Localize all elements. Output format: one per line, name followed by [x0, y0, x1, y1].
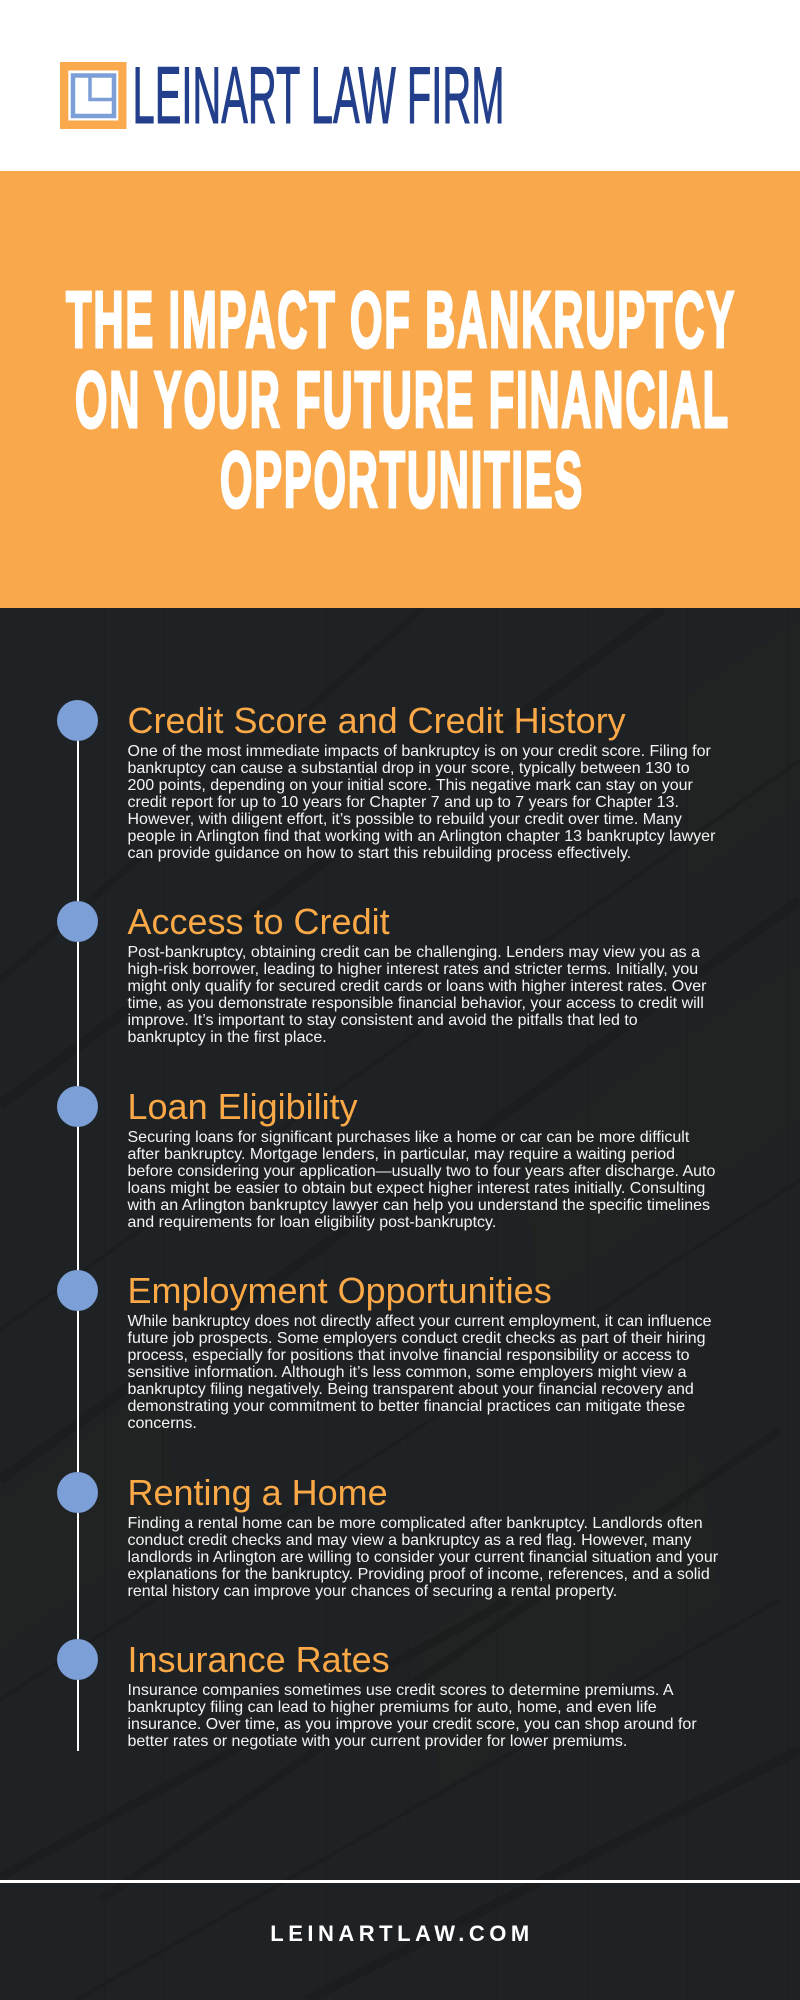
body text: Finding a rental home can be more complicated after bankruptcy. Landlords often — [128, 1514, 703, 1532]
icon: logo mark — [60, 62, 126, 129]
timeline dot — [57, 1472, 98, 1512]
body text — [128, 1313, 712, 1432]
body text: improve. It’s important to stay consistent and avoid the pitfalls that led to — [128, 1012, 638, 1028]
body text: bankruptcy filing negatively. Being transparent about your financial recovery and — [128, 1381, 694, 1398]
timeline dot — [57, 700, 98, 740]
body text: Securing loans for significant purchases like a home or car can be more difficult — [128, 1128, 689, 1146]
body text: bankruptcy can cause a substantial drop in your score, typically between 130 to — [128, 760, 690, 776]
title — [66, 275, 736, 524]
body text — [128, 1514, 718, 1600]
section: credit score and credit history — [57, 700, 716, 862]
body text — [128, 1682, 697, 1750]
body text: While bankruptcy does not directly affect your current employment, it can influence — [128, 1313, 712, 1330]
body text: loans might be easier to obtain but expect higher interest rates initially. Consulting — [128, 1180, 705, 1196]
banner: orange title panel — [0, 171, 800, 608]
body text: Insurance companies sometimes use credit scores to determine premiums. A — [128, 1682, 674, 1699]
body text: landlords in Arlington are willing to consider your current financial situation and your — [128, 1548, 718, 1566]
body text: demonstrating your commitment to better financial practices can mitigate these — [128, 1398, 685, 1415]
body text: before considering your application—usually two to four years after discharge. Auto — [128, 1162, 715, 1180]
body text: bankruptcy filing can lead to higher premiums for auto, home, and even life — [128, 1699, 657, 1716]
body text — [128, 742, 716, 862]
body text: after bankruptcy. Mortgage lenders, in particular, may require a waiting period — [128, 1146, 675, 1162]
logo — [60, 51, 504, 141]
body text: insurance. Over time, as you improve your credit score, you can shop around for — [128, 1716, 697, 1733]
section: insurance rates — [57, 1639, 697, 1750]
dark textured background panel — [0, 608, 800, 2000]
body text: 200 points, depending on your initial score. This negative mark can stay on your — [128, 776, 693, 794]
section: loan eligibility — [57, 1086, 715, 1230]
body text: One of the most immediate impacts of bankruptcy is on your credit score. Filing for — [128, 742, 711, 760]
timeline dot — [57, 900, 98, 942]
header: white logo band — [0, 0, 800, 171]
heading: Loan Eligibility — [128, 1086, 358, 1126]
body text: process, especially for positions that involve financial responsibility or access to — [128, 1347, 690, 1364]
body text: people in Arlington find that working with an Arlington chapter 13 bankruptcy lawyer — [128, 828, 715, 844]
heading: Credit Score and Credit History — [128, 700, 626, 740]
body text: bankruptcy in the first place. — [128, 1028, 327, 1046]
body text: can provide guidance on how to start this rebuilding process effectively. — [128, 844, 631, 862]
heading: Employment Opportunities — [128, 1270, 552, 1311]
body text: with an Arlington bankruptcy lawyer can help you understand the specific timelines — [128, 1196, 710, 1214]
body text: future job prospects. Some employers conduct credit checks as part of their hiring — [128, 1330, 706, 1347]
body text: might only qualify for secured credit cards or loans with higher interest rates. Over — [128, 978, 706, 994]
body text: better rates or negotiate with your current provider for lower premiums. — [128, 1733, 627, 1750]
heading: Renting a Home — [128, 1472, 388, 1512]
body text: rental history can improve your chances of securing a rental property. — [128, 1582, 617, 1600]
section: renting a home — [57, 1472, 718, 1600]
body text: credit report for up to 10 years for Chapter 7 and up to 7 years for Chapter 13. — [128, 794, 679, 810]
footer website: LEINARTLAW.COM — [270, 1921, 534, 1946]
timeline dot — [57, 1639, 98, 1680]
section: access to credit — [57, 900, 706, 1046]
body text: high-risk borrower, leading to higher interest rates and stricter terms. Initially, you — [128, 960, 698, 978]
body text: time, as you demonstrate responsible financial behavior, your access to credit will — [128, 994, 704, 1012]
body text: sensitive information. Although it’s less common, some employers might view a — [128, 1364, 687, 1381]
heading: Insurance Rates — [128, 1639, 390, 1680]
body text — [128, 1128, 715, 1230]
body text: conduct credit checks and may view a bankruptcy as a red flag. However, many — [128, 1532, 691, 1548]
section: employment opportunities — [57, 1270, 712, 1432]
body text: and requirements for loan eligibility post-bankruptcy. — [128, 1214, 496, 1230]
body text: Post-bankruptcy, obtaining credit can be challenging. Lenders may view you as a — [128, 944, 700, 960]
heading: Access to Credit — [128, 900, 390, 942]
body text: However, with diligent effort, it’s possible to rebuild your credit over time. Many — [128, 810, 682, 828]
body text — [128, 944, 706, 1046]
timeline dot — [57, 1086, 98, 1126]
body text: explanations for the bankruptcy. Providing proof of income, references, and a solid — [128, 1566, 710, 1582]
body text: concerns. — [128, 1415, 197, 1432]
footer divider — [0, 1880, 800, 1883]
timeline dot — [57, 1270, 98, 1311]
timeline vertical line — [77, 720, 79, 1751]
